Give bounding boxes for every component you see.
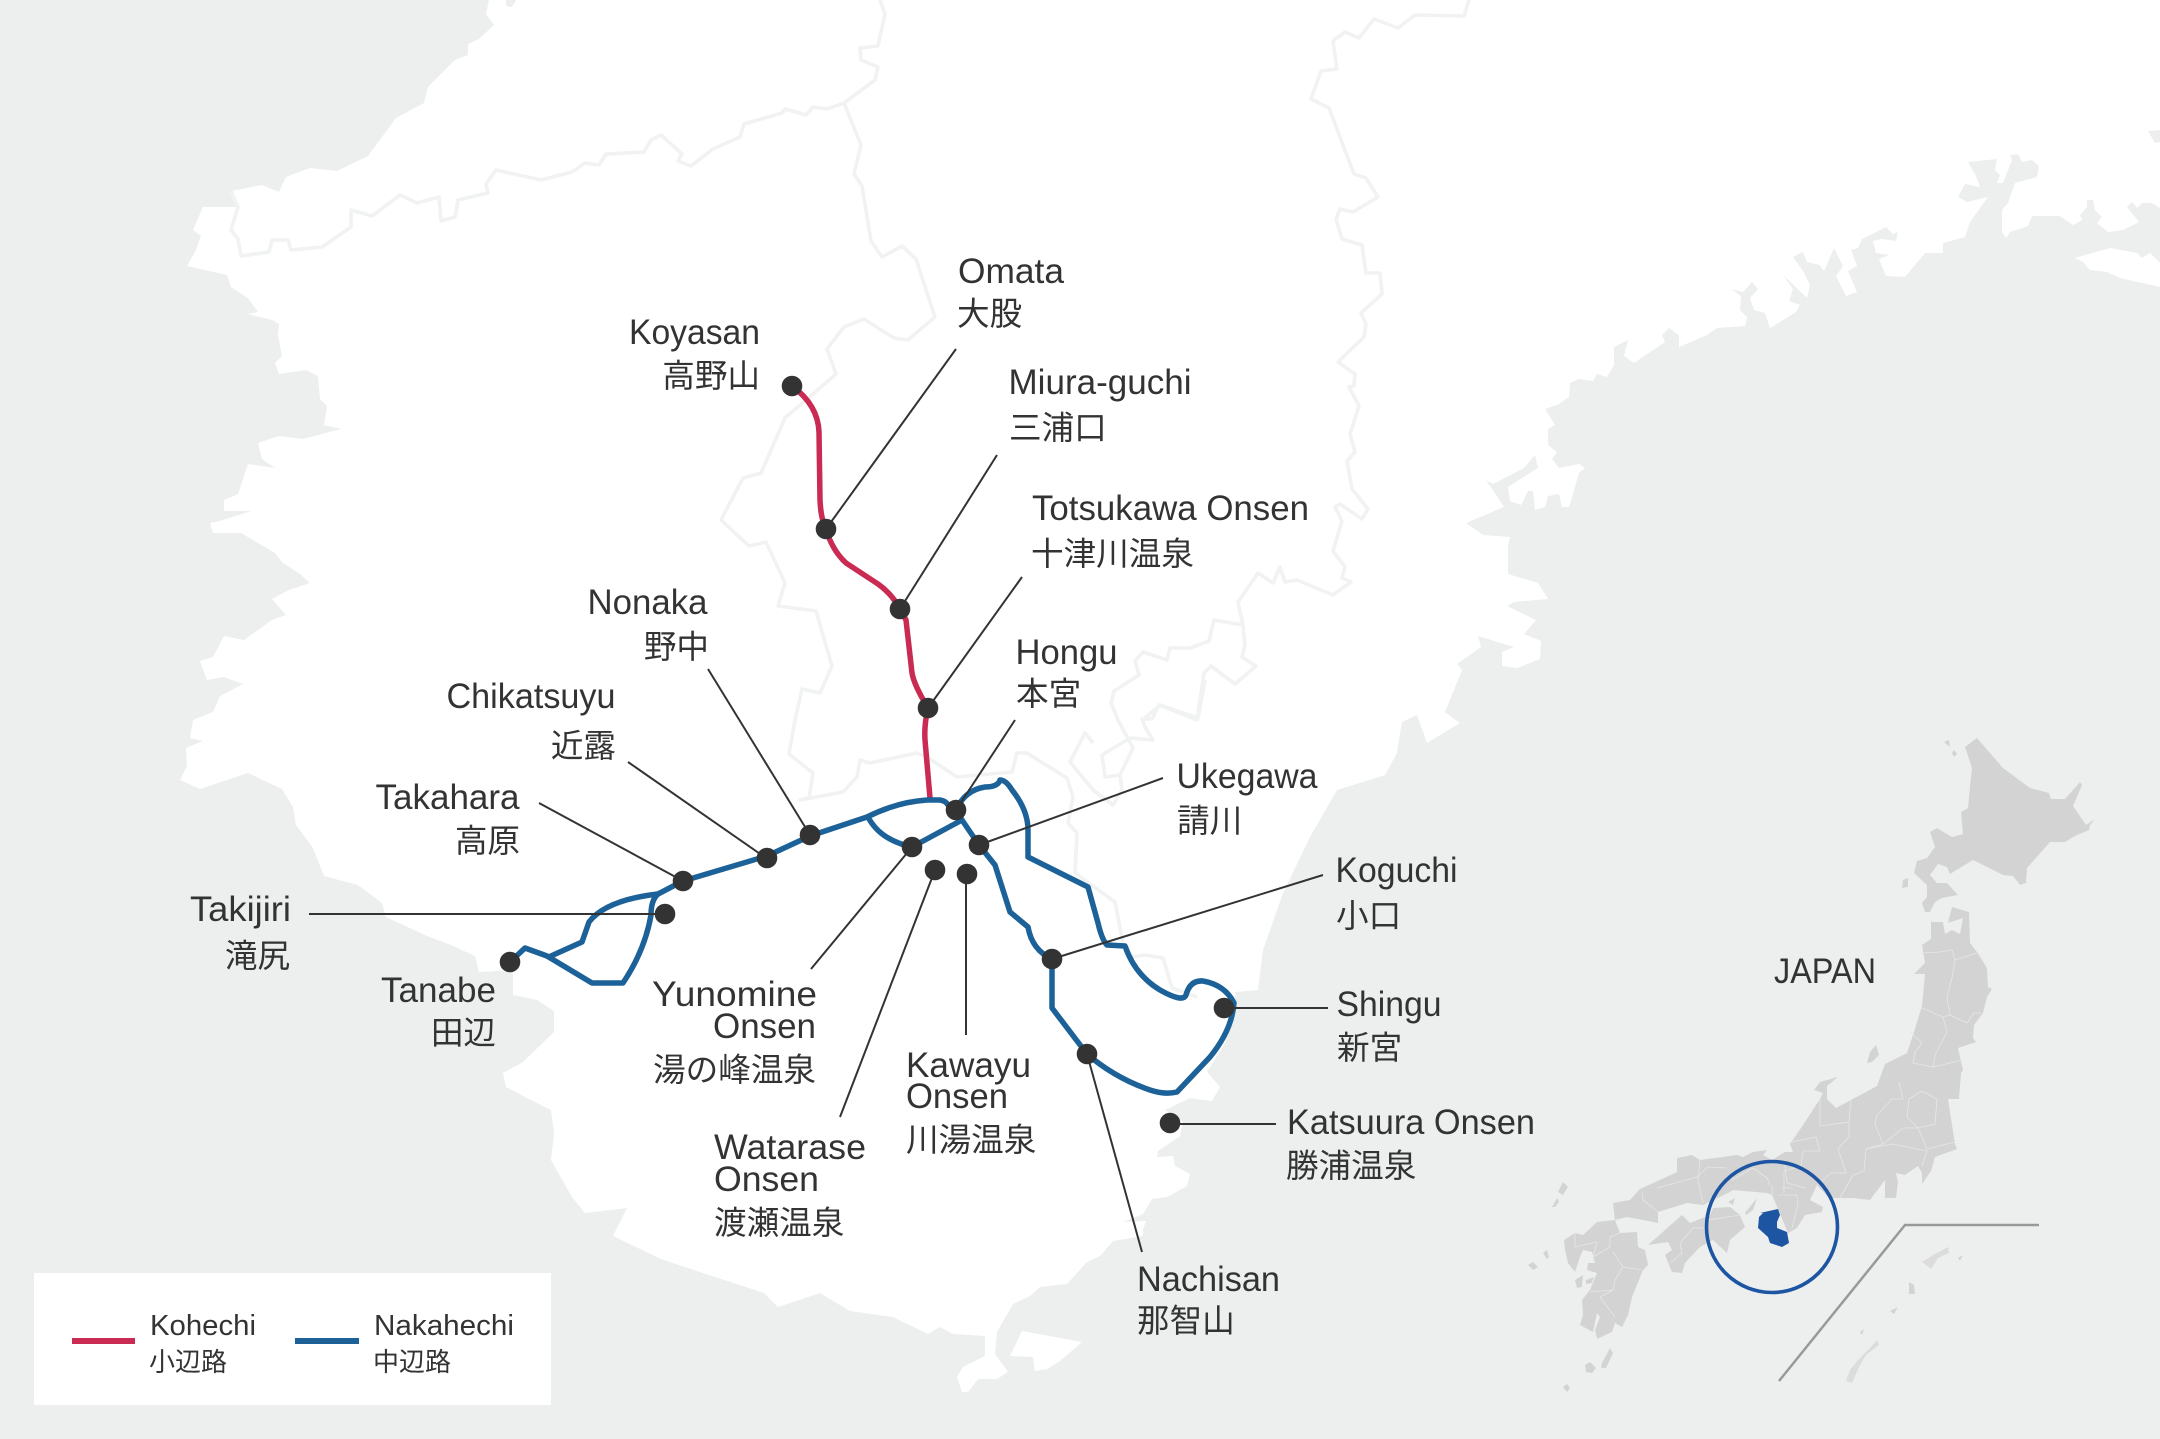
station: Tanabe bbox=[381, 952, 520, 1051]
Honshu bbox=[1613, 907, 1992, 1233]
station: Chikatsuyu: 近露 bbox=[551, 727, 616, 764]
station: Takijiri: Takijiri bbox=[190, 890, 291, 929]
station: Kawayu Onsen bbox=[906, 864, 1036, 1158]
station: Nachisan bbox=[1077, 1044, 1280, 1339]
station: Tanabe: 田辺 bbox=[431, 1014, 496, 1051]
station: Kawayu Onsen: Kawayu bbox=[906, 1046, 1031, 1085]
legend: Nakahechi bbox=[295, 1310, 514, 1377]
station: Miura-guchi bbox=[890, 363, 1192, 619]
Takijiri branch bbox=[551, 894, 658, 956]
Hokkaido bbox=[1914, 738, 2095, 912]
inset divider line bbox=[1779, 1225, 2039, 1381]
station: Omata bbox=[816, 252, 1065, 539]
station: Katsuura Onsen bbox=[1160, 1103, 1535, 1184]
station: Chikatsuyu bbox=[446, 677, 777, 868]
legend: Nakahechi: Nakahechi bbox=[374, 1310, 514, 1342]
station: Totsukawa Onsen: 十津川温泉 bbox=[1031, 535, 1194, 572]
small islands west and south bbox=[1528, 1182, 1963, 1392]
legend: Nakahechi: 中辺路 bbox=[373, 1347, 451, 1377]
Japan inset map bbox=[1528, 738, 2095, 1392]
station: Takahara: Takahara bbox=[376, 778, 520, 817]
station: Hongu: 本宮 bbox=[1016, 675, 1081, 712]
prefecture borders on the land map bbox=[231, 0, 1469, 997]
legend: Kohechi: 小辺路 bbox=[149, 1347, 227, 1377]
station: Ukegawa: Ukegawa bbox=[1176, 757, 1318, 796]
station: Yunomine Onsen bbox=[652, 837, 922, 1088]
station: Katsuura Onsen: 勝浦温泉 bbox=[1286, 1147, 1416, 1184]
station: Tanabe: Tanabe bbox=[381, 971, 496, 1010]
route: Kohechi bbox=[792, 386, 930, 798]
station: Chikatsuyu: Chikatsuyu bbox=[446, 677, 616, 716]
station: Nonaka bbox=[588, 583, 820, 845]
Shikoku bbox=[1648, 1207, 1745, 1273]
Kyushu bbox=[1564, 1220, 1648, 1339]
Ukegawa to Koguchi line bbox=[956, 810, 1052, 959]
station: Koguchi: Koguchi bbox=[1336, 851, 1458, 890]
station: Kawayu Onsen: Onsen bbox=[906, 1077, 1008, 1116]
station: Hongu: Hongu bbox=[1016, 633, 1118, 672]
station: Miura-guchi: 三浦口 bbox=[1009, 409, 1107, 446]
small sea patches at top bbox=[506, 0, 2160, 143]
Hongu to Koguchi upper line bbox=[956, 780, 1234, 1093]
station: Koyasan: 高野山 bbox=[662, 357, 760, 394]
station: Nachisan: 那智山 bbox=[1137, 1302, 1235, 1339]
station: Katsuura Onsen: Katsuura Onsen bbox=[1287, 1103, 1535, 1142]
station: Kawayu Onsen: 川湯温泉 bbox=[906, 1121, 1036, 1158]
station: Shingu: 新宮 bbox=[1337, 1029, 1402, 1066]
legend: Kohechi bbox=[72, 1310, 256, 1377]
label: JAPAN: JAPAN bbox=[1774, 952, 1876, 991]
station: Watarase Onsen bbox=[714, 860, 945, 1241]
station: Miura-guchi: Miura-guchi bbox=[1008, 363, 1192, 402]
station: Totsukawa Onsen bbox=[918, 489, 1309, 718]
station: Nonaka: Nonaka bbox=[588, 583, 708, 622]
station: Yunomine Onsen: 湯の峰温泉 bbox=[653, 1051, 816, 1088]
station: Nachisan: Nachisan bbox=[1137, 1260, 1280, 1299]
station: Watarase Onsen: Onsen bbox=[714, 1160, 819, 1199]
station: Omata: 大股 bbox=[957, 295, 1022, 332]
station: Watarase Onsen: 渡瀬温泉 bbox=[714, 1204, 844, 1241]
small islands north bbox=[1867, 740, 1957, 1063]
Japan prefecture lines bbox=[1575, 950, 1981, 1317]
station: Koyasan bbox=[629, 313, 802, 396]
station: Omata: Omata bbox=[958, 252, 1065, 291]
station: Yunomine Onsen: Yunomine bbox=[652, 975, 817, 1014]
station: Nonaka: 野中 bbox=[644, 628, 709, 665]
station: Takijiri bbox=[190, 890, 675, 974]
main line west to Hongu bbox=[510, 800, 948, 983]
legend bbox=[34, 1273, 551, 1405]
station: Takahara bbox=[376, 778, 693, 891]
route: Nakahechi bbox=[510, 780, 1234, 1093]
Wakayama prefecture highlight bbox=[1758, 1209, 1789, 1247]
station: Totsukawa Onsen: Totsukawa Onsen bbox=[1032, 489, 1309, 528]
Yunomine branch bbox=[868, 817, 962, 847]
station: Ukegawa bbox=[969, 757, 1318, 855]
station: Koguchi bbox=[1042, 851, 1458, 969]
station: Ukegawa: 請川 bbox=[1177, 802, 1242, 839]
station: Takijiri: 滝尻 bbox=[225, 937, 290, 974]
station: Hongu bbox=[946, 633, 1118, 820]
legend: Kohechi: Kohechi bbox=[150, 1310, 256, 1342]
station: Koguchi: 小口 bbox=[1336, 897, 1401, 934]
station: Koyasan: Koyasan bbox=[629, 313, 760, 352]
station: Watarase Onsen: Watarase bbox=[714, 1128, 866, 1167]
station: Shingu bbox=[1214, 985, 1442, 1066]
station: Yunomine Onsen: Onsen bbox=[713, 1007, 816, 1046]
station: Takahara: 高原 bbox=[455, 822, 520, 859]
station: Shingu: Shingu bbox=[1336, 985, 1442, 1024]
locator circle bbox=[1706, 1162, 1838, 1292]
